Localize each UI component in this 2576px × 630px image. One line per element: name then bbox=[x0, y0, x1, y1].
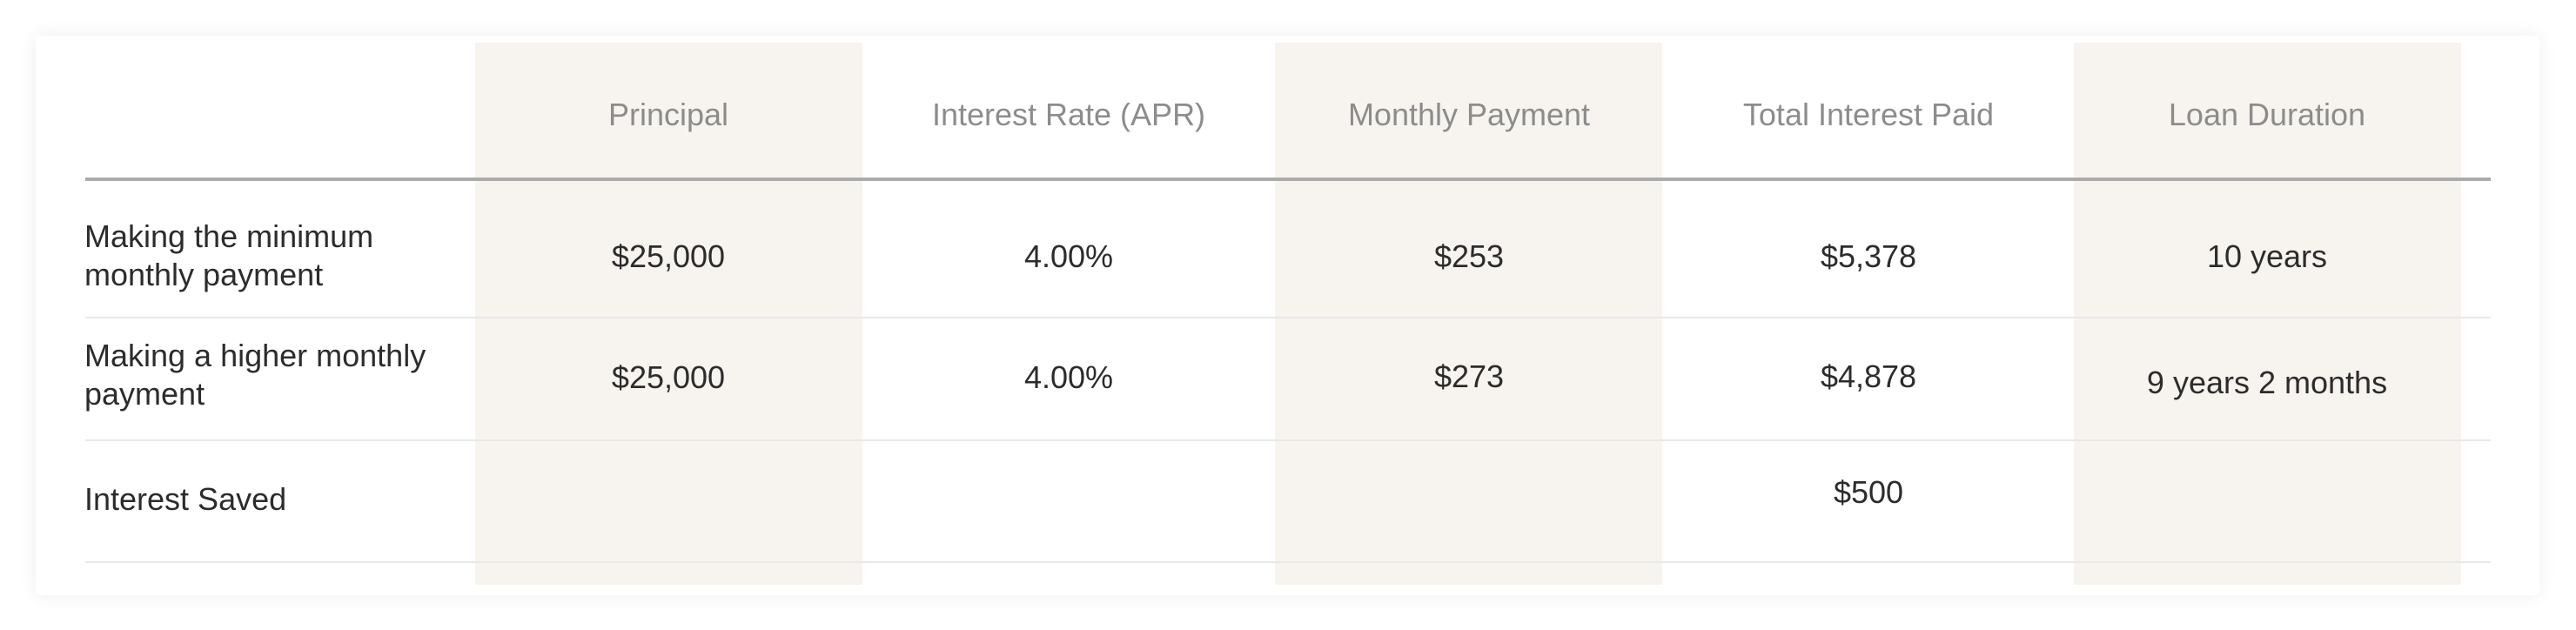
row 2 values bbox=[612, 359, 2387, 400]
text: $5,378 bbox=[1821, 238, 1916, 274]
column shading: Loan Duration bbox=[2074, 43, 2461, 585]
text: 4.00% bbox=[1024, 238, 1113, 274]
row label: interest saved: Interest Saved bbox=[84, 481, 286, 517]
row 3 value: $500 bbox=[1834, 474, 1903, 510]
text: $25,000 bbox=[612, 359, 725, 395]
text: $253 bbox=[1434, 238, 1504, 274]
header: Loan Duration: Loan Duration bbox=[2169, 97, 2365, 132]
header: Interest Rate: Interest Rate (APR) bbox=[932, 97, 1205, 132]
header: Principal: Principal bbox=[608, 97, 728, 132]
header: Monthly Payment: Monthly Payment bbox=[1348, 97, 1590, 132]
row label: higher payment: payment bbox=[84, 376, 205, 412]
column shading: Principal bbox=[475, 43, 862, 585]
row label: higher payment: Making a higher monthly bbox=[84, 338, 426, 373]
row label: minimum payment: monthly payment bbox=[84, 257, 323, 292]
text: 10 years bbox=[2207, 238, 2327, 274]
row 1 values bbox=[612, 238, 2327, 274]
text: $273 bbox=[1434, 359, 1504, 394]
row label: minimum payment: Making the minimum bbox=[84, 218, 373, 254]
row label: minimum payment bbox=[84, 218, 373, 292]
text: $25,000 bbox=[612, 238, 725, 274]
header: Total Interest Paid: Total Interest Paid bbox=[1743, 97, 1994, 132]
row label: higher payment bbox=[84, 338, 426, 412]
text: $4,878 bbox=[1821, 359, 1916, 394]
header divider bbox=[85, 178, 2491, 181]
column shading: Monthly Payment bbox=[1275, 43, 1662, 585]
text: 4.00% bbox=[1024, 359, 1113, 395]
text: 9 years 2 months bbox=[2147, 365, 2387, 400]
